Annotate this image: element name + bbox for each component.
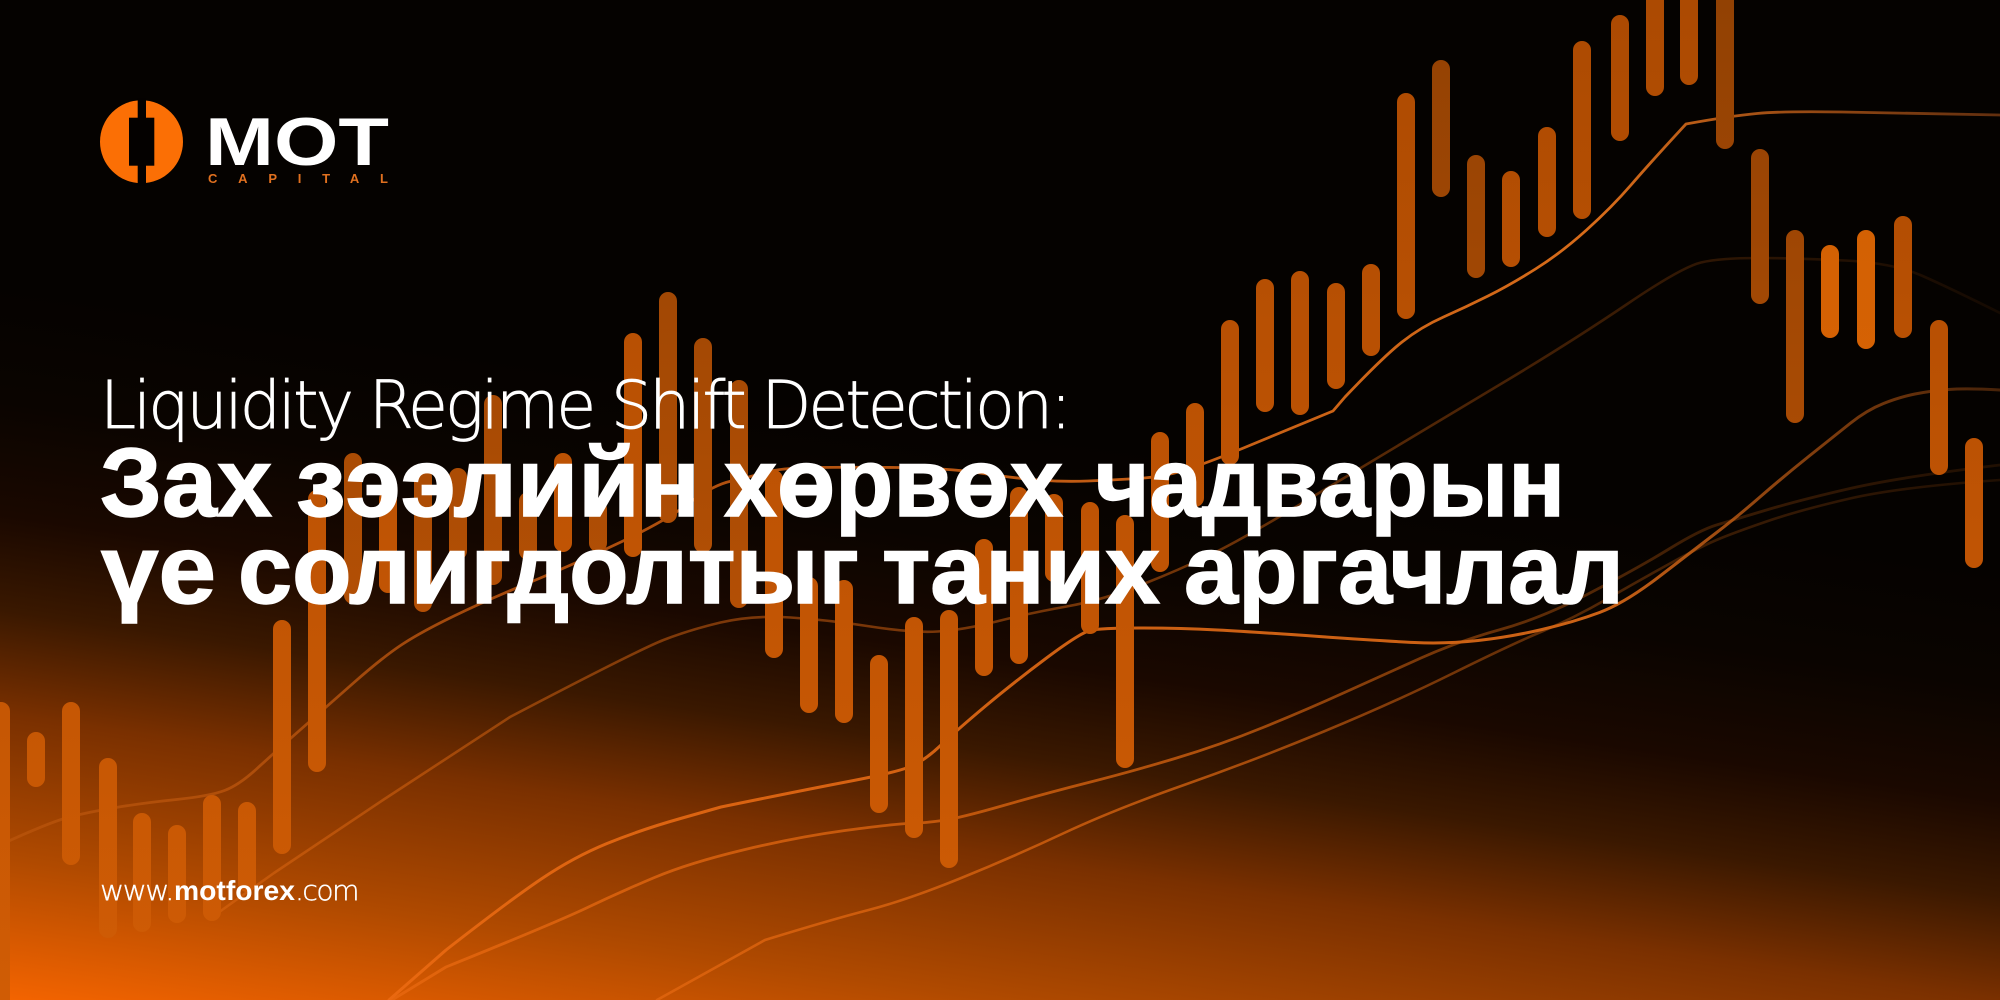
logo: MOT Capital xyxy=(100,98,389,186)
logo tagline: CAPITAL xyxy=(208,171,388,186)
title line 1: зээлийн xyxy=(296,428,700,537)
title line 1: чадварын xyxy=(1095,428,1565,537)
title line 2: солигдолтыг xyxy=(238,515,859,624)
title line 2: аргачлал xyxy=(1184,515,1624,624)
title line 2: таних xyxy=(882,515,1160,624)
line: upper moving average xyxy=(0,112,2000,845)
title line 1: хөрвөх xyxy=(724,428,1063,537)
logo wordmark: MOT xyxy=(205,104,389,180)
icon: candlestick in circle xyxy=(100,98,183,186)
website url: motforex xyxy=(174,875,295,906)
line: lowest average xyxy=(657,480,2000,1000)
website url: www. xyxy=(100,874,173,907)
subtitle: Liquidity Regime Shift Detection: xyxy=(100,367,1069,444)
line: lower average xyxy=(392,465,2000,1000)
line: faint long-term average xyxy=(215,258,2000,915)
line: bright middle average xyxy=(389,389,2000,1000)
title line 2: үе xyxy=(101,515,216,624)
website url: .com xyxy=(295,874,358,907)
title xyxy=(100,428,1624,624)
title line 1: Зах xyxy=(100,428,272,537)
